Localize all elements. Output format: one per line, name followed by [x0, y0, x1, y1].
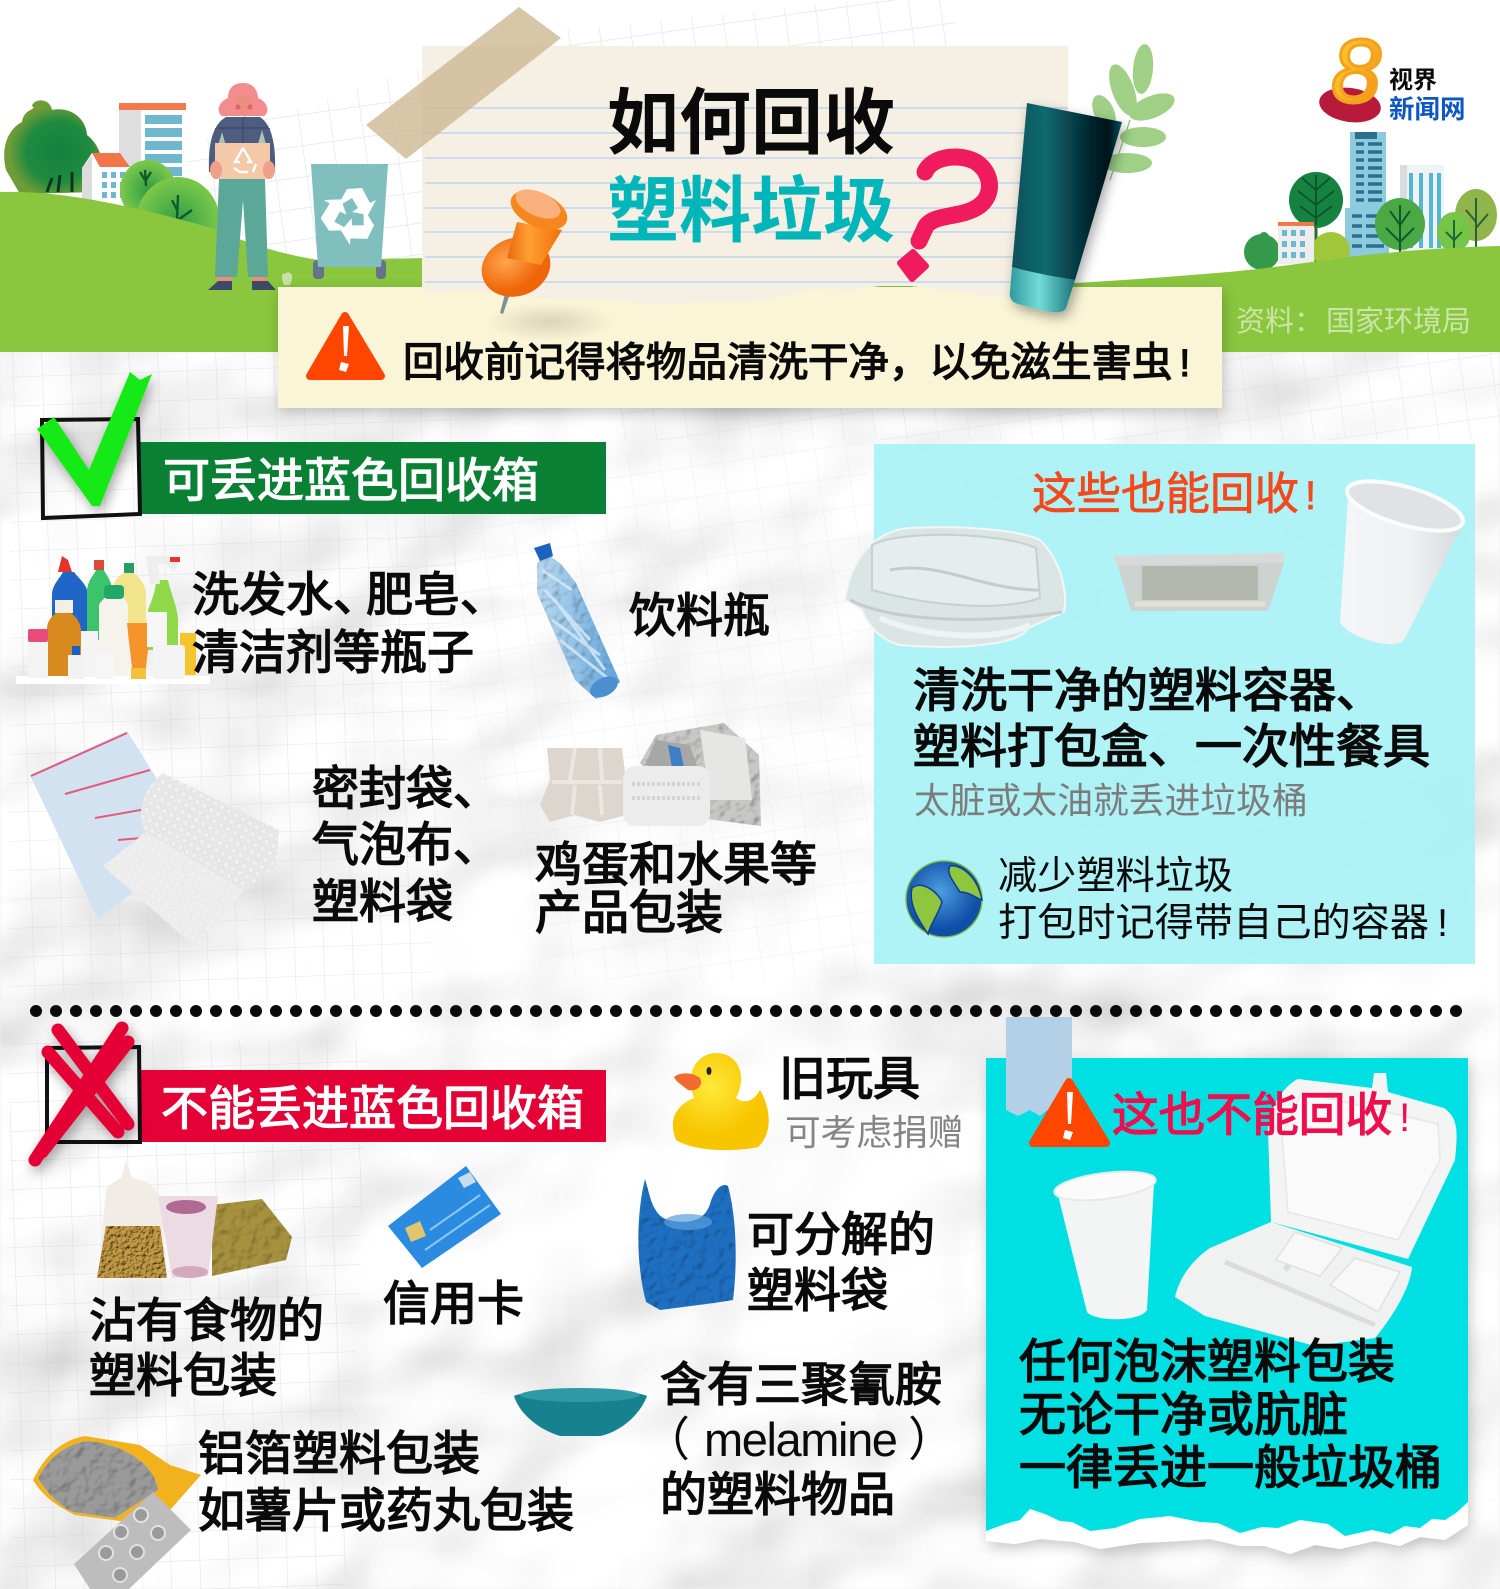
title heading: 塑料垃圾 — [607, 172, 895, 252]
logo text — [1389, 67, 1466, 124]
big tree — [4, 100, 102, 194]
rectangular tub — [1113, 553, 1284, 611]
label: biodegradable bags: 可分解的 — [747, 1208, 935, 1261]
item: foil chip bag and blister pack — [33, 1436, 201, 1589]
panel text: 清洗干净的塑料容器、 — [913, 664, 1383, 717]
reduce plastic text — [998, 855, 1448, 945]
panel white torn edge — [986, 1058, 1468, 1554]
label: melamine — [643, 1358, 955, 1521]
panel text: 太脏或太油就丢进垃圾桶 — [914, 781, 1308, 821]
bushes — [120, 160, 220, 267]
item: credit card — [388, 1166, 501, 1268]
item: melamine bowl — [514, 1388, 647, 1436]
hill — [780, 246, 1500, 352]
logo text: 视界 — [1389, 67, 1437, 94]
green check mark — [37, 372, 152, 506]
title heading — [607, 84, 895, 252]
foam clamshell box — [1175, 1073, 1457, 1346]
label: melamine: ） — [908, 1413, 955, 1466]
item: zip bags and bubble wrap — [30, 731, 279, 947]
right hill scene — [780, 132, 1500, 352]
clamshell container — [845, 527, 1065, 647]
yellow warning note — [278, 287, 1222, 408]
label: egg packaging — [535, 838, 817, 939]
title heading: 如何回收 — [607, 84, 895, 164]
reduce plastic text: 打包时记得带自己的容器! — [998, 902, 1448, 945]
item: PET bottle — [534, 543, 621, 702]
label: bags: 密封袋、 — [312, 762, 500, 815]
label: egg packaging: 产品包装 — [535, 886, 723, 939]
label: melamine: 含有三聚氰胺 — [660, 1358, 942, 1411]
panel text — [1019, 1335, 1442, 1494]
label: biodegradable bags: 塑料袋 — [747, 1264, 888, 1317]
blue tape — [1006, 1017, 1072, 1116]
non-recyclable section header — [35, 1028, 606, 1160]
label: foil packaging: 铝箔塑料包装 — [198, 1427, 480, 1480]
label: drink bottles: 饮料瓶 — [629, 589, 770, 642]
person carrying box — [208, 83, 276, 290]
label: old toys: 旧玩具 — [779, 1052, 920, 1105]
small building — [1278, 222, 1314, 264]
label: foil packaging: 如薯片或药丸包装 — [198, 1484, 574, 1537]
label: soiled packaging: 沾有食物的 — [89, 1294, 324, 1347]
small house — [82, 153, 130, 205]
panel heading: 这些也能回收! — [1032, 470, 1316, 519]
panel text: 塑料打包盒、一次性餐具 — [913, 720, 1430, 773]
label: credit card: 信用卡 — [383, 1277, 524, 1330]
label: soiled packaging: 塑料包装 — [89, 1349, 277, 1402]
globe icon — [906, 861, 982, 937]
panel cyan fill — [986, 1058, 1468, 1536]
panel: also recyclable — [845, 444, 1475, 964]
label: bottles: 洗发水、肥皂、 — [192, 568, 507, 621]
label: bottles: 清洁剂等瓶子 — [192, 626, 474, 679]
warning triangle — [310, 316, 381, 376]
pin shadow — [485, 302, 615, 342]
leaf sprig — [1087, 43, 1178, 180]
panel text: 无论干净或肮脏 — [1019, 1388, 1348, 1441]
warning text: 回收前记得将物品清洗干净，以免滋生害虫! — [403, 339, 1190, 385]
panel: also not recyclable — [986, 1017, 1468, 1554]
title paper note — [366, 7, 1068, 314]
foam cup — [1053, 1167, 1157, 1319]
tape — [366, 7, 561, 159]
second building — [1400, 165, 1444, 253]
logo mark: 8 — [1331, 22, 1381, 122]
checkbox — [42, 419, 140, 518]
checkbox — [47, 1047, 140, 1142]
label: bags: 塑料袋 — [312, 875, 453, 928]
label: foil packaging — [198, 1427, 574, 1537]
label: bags — [312, 762, 500, 928]
tall building — [1345, 132, 1389, 258]
hill — [0, 192, 430, 352]
source credit: 国家环境局 — [1326, 305, 1471, 338]
push pin — [473, 182, 573, 314]
item: blue plastic bag — [638, 1179, 736, 1310]
label: melamine: （ — [643, 1413, 690, 1466]
plastic cup — [1340, 471, 1468, 644]
item: food-soiled packaging — [97, 1160, 292, 1278]
banner text: 可丢进蓝色回收箱 — [163, 454, 539, 507]
recyclable section header — [37, 372, 606, 518]
label: old toys — [779, 1052, 963, 1153]
warning triangle — [1033, 1082, 1106, 1143]
logo text: 新闻网 — [1389, 96, 1466, 124]
reduce plastic text: 减少塑料垃圾 — [998, 855, 1233, 898]
left hill scene — [0, 83, 430, 352]
apartment building — [119, 103, 186, 194]
panel text: 一律丢进一般垃圾桶 — [1019, 1441, 1442, 1494]
green tube — [1010, 103, 1122, 312]
banner text: 不能丢进蓝色回收箱 — [161, 1082, 584, 1135]
red cross — [35, 1028, 128, 1160]
item: egg and fruit packaging — [540, 723, 761, 826]
recycling bin — [311, 164, 388, 279]
question mark — [900, 157, 990, 279]
item: rubber duck — [673, 1053, 769, 1150]
panel text — [913, 664, 1430, 821]
label: melamine: 的塑料物品 — [660, 1468, 895, 1521]
panel text: 任何泡沫塑料包装 — [1019, 1335, 1395, 1388]
red banner — [141, 1070, 606, 1142]
panel heading: 这也不能回收! — [1112, 1089, 1410, 1141]
small sprout — [282, 272, 292, 285]
label: old toys: 可考虑捐赠 — [785, 1113, 963, 1153]
label: soiled packaging — [89, 1294, 324, 1402]
label: bottles — [192, 568, 507, 679]
item: household bottles — [16, 556, 210, 684]
label: melamine: melamine — [704, 1413, 897, 1466]
dotted divider — [36, 1005, 1460, 1017]
label: bags: 气泡布、 — [312, 818, 500, 871]
green banner — [140, 442, 606, 514]
label: biodegradable bags — [747, 1208, 935, 1317]
label: egg packaging: 鸡蛋和水果等 — [535, 838, 817, 891]
round trees — [1244, 172, 1497, 270]
source credit: 资料： — [1236, 306, 1323, 338]
8world logo — [1317, 22, 1466, 126]
